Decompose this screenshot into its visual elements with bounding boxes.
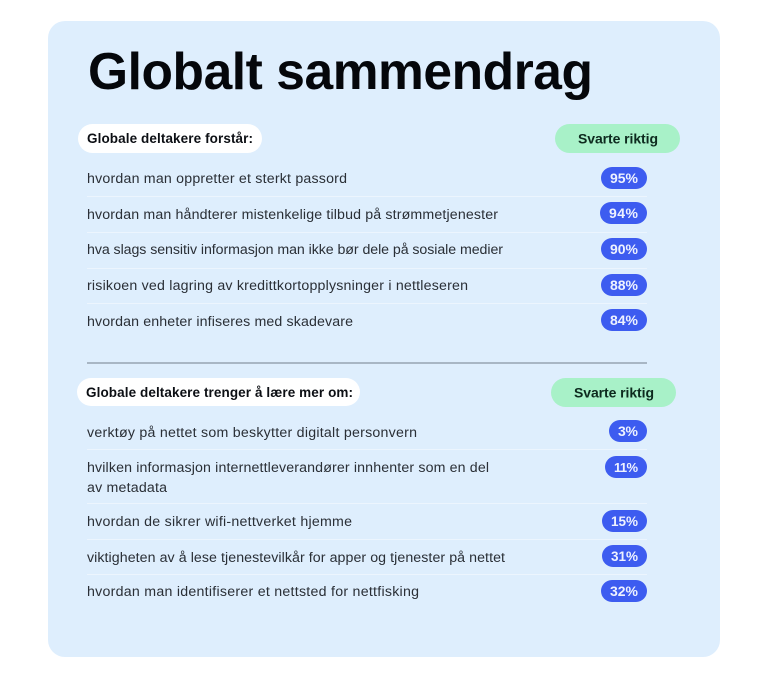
row: home wifi: hvordan de sikrer wifi-nettverket hjemme xyxy=(87,514,352,530)
row: privacy tools: verktøy på nettet som beskytter digitalt personvern xyxy=(87,425,417,441)
column label: answered correctly xyxy=(555,124,680,153)
row: home wifi xyxy=(87,510,647,532)
column label: answered correctly: Svarte riktig xyxy=(578,130,658,146)
row: streaming offers: hvordan man håndterer mistenkelige tilbud på strømmetjenester xyxy=(87,207,498,223)
row: sensitive information: hva slags sensitiv informasjon man ikke bør dele på sosiale medier xyxy=(87,242,503,258)
heading pill: need to learn xyxy=(77,378,360,406)
title: Globalt sammendrag xyxy=(88,42,593,100)
row: metadata: hvilken informasjon internettleverandører innhenter som en del xyxy=(87,460,489,476)
row: sensitive information xyxy=(87,238,647,260)
column label: answered correctly xyxy=(551,378,676,407)
heading pill: understood xyxy=(78,124,262,153)
row: metadata: av metadata xyxy=(87,480,167,496)
row: terms of service xyxy=(87,545,647,567)
row: malware xyxy=(87,309,647,331)
row: streaming offers xyxy=(87,202,647,224)
row: terms of service: viktigheten av å lese tjenestevilkår for apper og tjenester på nettet xyxy=(87,550,505,566)
row: sensitive information: 90% xyxy=(610,241,639,257)
row: phishing: 32% xyxy=(610,583,639,599)
section 1: understood topics xyxy=(78,124,680,331)
row: credit card storage: 88% xyxy=(610,277,639,293)
row: terms of service: 31% xyxy=(611,549,638,564)
row: privacy tools xyxy=(87,420,647,442)
row: streaming offers: 94% xyxy=(609,205,639,221)
row: malware: 84% xyxy=(610,312,639,328)
row: strong password: hvordan man oppretter et sterkt passord xyxy=(87,171,347,187)
row: malware: hvordan enheter infiseres med skadevare xyxy=(87,314,353,330)
row: metadata: 11% xyxy=(614,460,638,475)
row: privacy tools: 3% xyxy=(618,423,639,439)
section 2: topics to learn xyxy=(77,378,676,602)
row: phishing: hvordan man identifiserer et nettsted for nettfisking xyxy=(87,584,419,600)
row: strong password xyxy=(87,167,647,189)
row: credit card storage: risikoen ved lagring av kredittkortopplysninger i nettleseren xyxy=(87,278,468,294)
column label: answered correctly: Svarte riktig xyxy=(574,384,654,400)
row: phishing xyxy=(87,580,647,602)
heading pill: need to learn: Globale deltakere trenger å lære mer om: xyxy=(86,385,353,400)
row: strong password: 95% xyxy=(610,170,639,186)
heading pill: understood: Globale deltakere forstår: xyxy=(87,131,253,146)
row: credit card storage xyxy=(87,274,647,296)
row: home wifi: 15% xyxy=(611,514,638,529)
row: metadata xyxy=(87,456,647,496)
